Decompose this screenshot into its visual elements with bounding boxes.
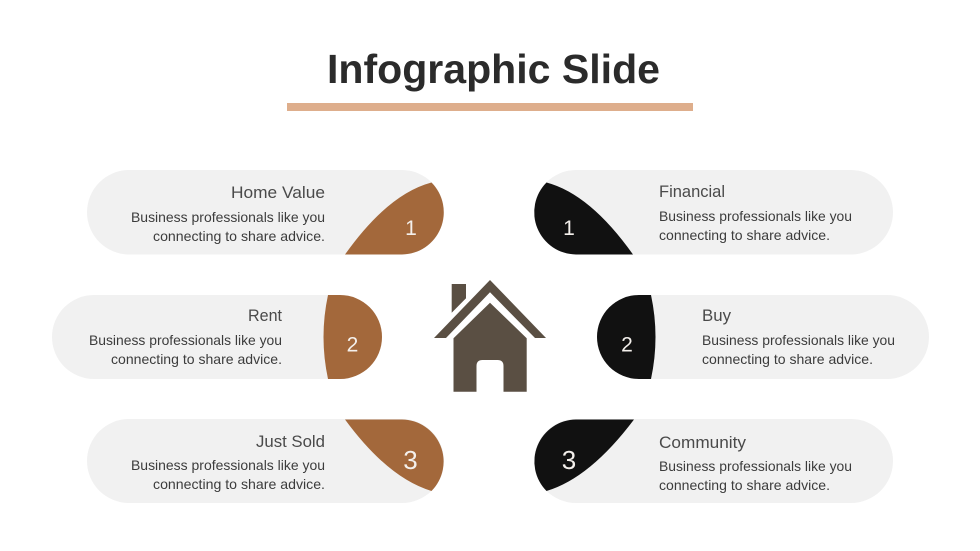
number 3: 3 <box>403 445 418 475</box>
panel: Just Sold <box>87 419 444 503</box>
text: Financial description: Business professionals like you <box>659 208 852 224</box>
heading: Just Sold: Just Sold <box>256 432 325 451</box>
text: Buy description: Business professionals like you <box>702 332 895 348</box>
tab: brown number 1 <box>345 182 444 254</box>
text: Buy description <box>702 332 895 367</box>
number 1: 1 <box>405 217 417 240</box>
text: Community description <box>659 458 852 493</box>
number 1: 1 <box>563 217 575 240</box>
title underline <box>287 103 693 111</box>
title: Infographic Slide <box>327 46 660 92</box>
number 3: 3 <box>562 445 576 475</box>
panel: Rent <box>52 295 382 379</box>
text: Financial description: connecting to share advice. <box>659 227 830 243</box>
heading: Buy: Buy <box>702 306 731 325</box>
heading: Home Value: Home Value <box>231 183 325 202</box>
text: Rent description: Business professionals like you <box>89 332 282 348</box>
text: Home Value description: Business professionals like you <box>131 209 325 225</box>
number 2: 2 <box>347 334 358 356</box>
heading: Rent: Rent <box>248 306 282 325</box>
panel: Buy <box>597 295 929 379</box>
icon: house <box>434 280 546 392</box>
text: Just Sold description: connecting to share advice. <box>153 476 325 492</box>
text: Rent description: connecting to share advice. <box>111 351 282 367</box>
text: Financial description <box>659 208 852 243</box>
text: Home Value description: connecting to share advice. <box>153 228 325 244</box>
tab: black number 3 <box>534 420 634 491</box>
text: Just Sold description <box>131 457 325 492</box>
tab: black number 2 <box>597 295 656 379</box>
panel: Home Value <box>87 170 444 254</box>
panel: Financial <box>534 170 893 254</box>
heading: Community: Community <box>659 433 747 452</box>
number 2: 2 <box>621 334 633 356</box>
text: Rent description <box>89 332 282 367</box>
text: Buy description: connecting to share advice. <box>702 351 873 367</box>
panel: Community <box>534 419 893 503</box>
tab: brown number 2 <box>324 295 382 379</box>
heading: Financial: Financial <box>659 182 725 201</box>
text: Just Sold description: Business professionals like you <box>131 457 325 473</box>
tab: black number 1 <box>534 182 633 254</box>
tab: brown number 3 <box>345 420 444 491</box>
text: Community description: Business professionals like you <box>659 458 852 474</box>
text: Home Value description <box>131 209 325 244</box>
text: Community description: connecting to share advice. <box>659 477 830 493</box>
